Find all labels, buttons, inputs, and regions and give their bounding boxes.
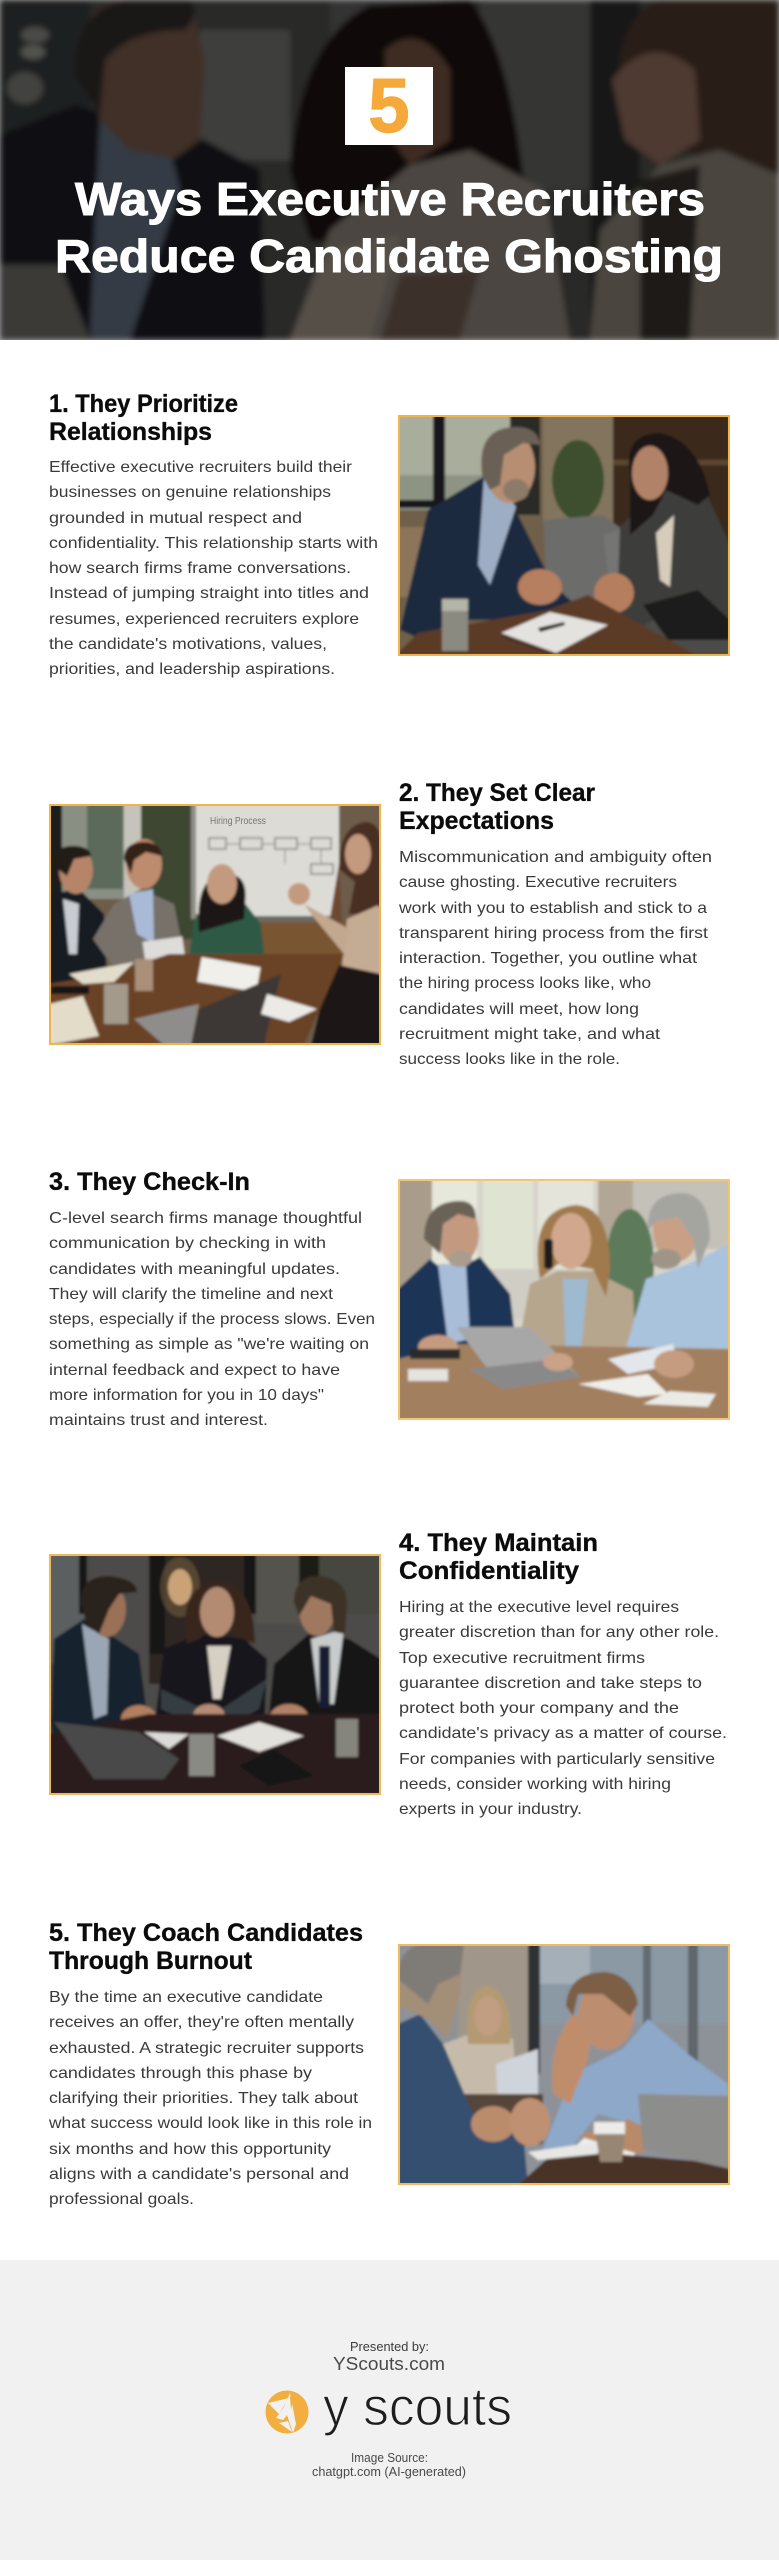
panel: 2. They Set Clear Expectations [49, 779, 712, 1068]
title [55, 173, 723, 282]
body text 5: receives an offer, they're often mentally [49, 2014, 354, 2031]
body text 2: work with you to establish and stick to a [398, 900, 707, 917]
body text 5: By the time an executive candidate [49, 1989, 323, 2006]
body text 5: what success would look like in this role in [48, 2115, 372, 2132]
body text 3: candidates with meaningful updates. [49, 1261, 340, 1278]
logo wordmark: y scouts [323, 2377, 512, 2437]
heading 2: 2. They Set Clear [399, 779, 595, 807]
body text 2: candidates will meet, how long [399, 1001, 639, 1018]
body text 4: greater discretion than for any other role. [399, 1624, 719, 1641]
body text 3: They will clarify the timeline and next [49, 1286, 334, 1303]
body text 2: success looks like in the role. [399, 1051, 620, 1068]
body text 4: Hiring at the executive level requires [399, 1599, 679, 1616]
photo: recruiter coaching a stressed candidate [398, 1944, 730, 2185]
body text 3: internal feedback and expect to have [49, 1362, 340, 1379]
body text 3: C-level search firms manage thoughtful [49, 1210, 362, 1227]
body text 3: more information for you in 10 days" [49, 1387, 324, 1404]
photo: three colleagues at a laptop [398, 1179, 730, 1420]
heading 4: 4. They Maintain [399, 1529, 598, 1557]
title: Reduce Candidate Ghosting [55, 230, 723, 282]
body text 4: needs, consider working with hiring [399, 1776, 671, 1793]
heading 1 [49, 390, 238, 446]
website name: YScouts.com [333, 2354, 445, 2374]
body text 4: For companies with particularly sensitive [399, 1751, 715, 1768]
body text 1: confidentiality. This relationship starts with [49, 535, 378, 552]
heading 1: Relationships [49, 418, 212, 446]
heading 2 [399, 779, 595, 835]
heading 5: 5. They Coach Candidates [49, 1919, 363, 1947]
number badge [345, 64, 433, 149]
panel: 1. They Prioritize Relationships [49, 390, 730, 678]
body text 3: something as simple as "we're waiting on [49, 1336, 369, 1353]
photo: recruiter and candidate talking on sofa [398, 415, 730, 657]
heading 5: Through Burnout [49, 1947, 253, 1975]
image source value: chatgpt.com (AI-generated) [312, 2465, 466, 2479]
body text 3 [49, 1210, 375, 1429]
body text 3: maintains trust and interest. [49, 1412, 268, 1429]
panel: 5. They Coach Candidates Through Burnout [48, 1919, 730, 2208]
body text 4: candidate's privacy as a matter of course. [399, 1725, 727, 1742]
body text 4: protect both your company and the [399, 1700, 679, 1717]
image source label: Image Source: [351, 2451, 428, 2465]
body text 2: interaction. Together, you outline what [399, 950, 698, 967]
photo: team meeting at whiteboard [49, 804, 381, 1045]
number badge: 5 [368, 64, 410, 149]
body text 4: Top executive recruitment firms [399, 1650, 645, 1667]
heading 4: Confidentiality [399, 1557, 579, 1585]
body text 5 [48, 1989, 372, 2208]
body text 1 [49, 459, 378, 678]
body text 1: Instead of jumping straight into titles and [49, 585, 369, 602]
body text 3: steps, especially if the process slows. Even [49, 1311, 375, 1328]
body text 5: aligns with a candidate's personal and [49, 2166, 349, 2183]
hero background photo [0, 0, 779, 340]
body text 1: how search firms frame conversations. [49, 560, 351, 577]
body text 5: professional goals. [49, 2191, 194, 2208]
heading 3: 3. They Check-In [49, 1168, 250, 1196]
panel: 4. They Maintain Confidentiality [49, 1529, 727, 1818]
body text 1: businesses on genuine relationships [49, 484, 331, 501]
body text 2 [398, 849, 712, 1068]
body text 1: the candidate's motivations, values, [49, 636, 327, 653]
body text 2: cause ghosting. Executive recruiters [399, 874, 677, 891]
body text 1: grounded in mutual respect and [49, 510, 302, 527]
icon: y scouts logo mark [266, 2390, 308, 2434]
photo: confidential discussion in dark boardroom [49, 1554, 381, 1795]
body text 5: clarifying their priorities. They talk about [49, 2090, 359, 2107]
heading 4 [399, 1529, 598, 1585]
body text 5: candidates through this phase by [49, 2065, 312, 2082]
hero banner [0, 0, 779, 340]
body text 1: priorities, and leadership aspirations. [49, 661, 335, 678]
body text 2: transparent hiring process from the first [399, 925, 709, 942]
body text 4: experts in your industry. [399, 1801, 582, 1818]
body text 2: recruitment might take, and what [399, 1026, 661, 1043]
presented by label: Presented by: [350, 2340, 429, 2354]
heading 5 [49, 1919, 363, 1975]
body text 2: the hiring process looks like, who [399, 975, 651, 992]
body text 2: Miscommunication and ambiguity often [399, 849, 712, 866]
panel: 3. They Check-In [49, 1168, 730, 1429]
body text 1: Effective executive recruiters build their [49, 459, 353, 476]
heading 2: Expectations [399, 807, 554, 835]
body text 5: exhausted. A strategic recruiter supports [49, 2040, 364, 2057]
footer panel [0, 2260, 779, 2560]
body text 4: guarantee discretion and take steps to [399, 1675, 702, 1692]
title: Ways Executive Recruiters [75, 173, 705, 225]
heading 1: 1. They Prioritize [49, 390, 238, 418]
body text 1: resumes, experienced recruiters explore [49, 611, 359, 628]
body text 5: six months and how this opportunity [49, 2141, 331, 2158]
body text 3: communication by checking in with [49, 1235, 326, 1252]
body text 4 [399, 1599, 727, 1818]
whiteboard caption: Hiring Process [210, 816, 266, 827]
